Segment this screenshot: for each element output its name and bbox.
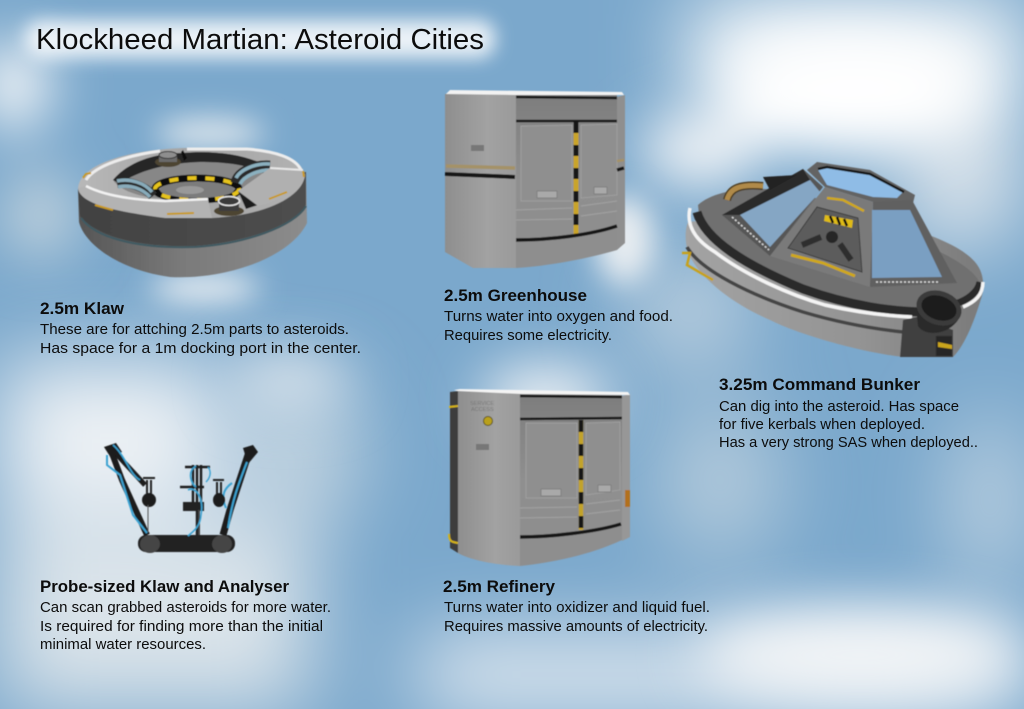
text: 2.5m Greenhouse: 2.5m Greenhouse bbox=[444, 286, 587, 305]
text: 3.25m Command Bunker: Can dig into the asteroid. Has space bbox=[719, 399, 959, 415]
text: 2.5m Klaw: 2.5m Klaw bbox=[40, 299, 125, 318]
text: 2.5m Klaw bbox=[40, 299, 361, 357]
text: 3.25m Command Bunker: Has a very strong SAS when deployed.. bbox=[719, 435, 978, 451]
part: 3.25m Command Bunker model bbox=[682, 162, 983, 357]
text: 3.25m Command Bunker: 3.25m Command Bunker bbox=[719, 375, 920, 394]
text: 2.5m Klaw: These are for attching 2.5m parts to asteroids. bbox=[40, 322, 349, 338]
text: 2.5m Refinery: Turns water into oxidizer and liquid fuel. bbox=[444, 600, 710, 616]
text: 2.5m Refinery bbox=[443, 577, 710, 635]
part: Probe-sized Klaw and Analyser model bbox=[104, 443, 258, 553]
text: 2.5m Klaw: Has space for a 1m docking port in the center. bbox=[40, 341, 361, 357]
text: 2.5m Greenhouse: Requires some electricity. bbox=[444, 328, 612, 344]
part: 2.5m Refinery model bbox=[449, 389, 630, 566]
text: Probe-sized Klaw and Analyser bbox=[40, 577, 331, 653]
text: 3.25m Command Bunker bbox=[719, 375, 978, 451]
text: 2.5m Greenhouse: Turns water into oxygen and food. bbox=[444, 309, 673, 325]
text: 2.5m Refinery: Requires massive amounts of electricity. bbox=[444, 619, 708, 635]
text: Probe-sized Klaw and Analyser: Probe-sized Klaw and Analyser bbox=[40, 577, 289, 596]
part: 2.5m Klaw model bbox=[78, 148, 307, 277]
text: Probe-sized Klaw and Analyser: minimal water resources. bbox=[40, 637, 206, 653]
text: 2.5m Greenhouse bbox=[444, 286, 673, 344]
text: Probe-sized Klaw and Analyser: Can scan grabbed asteroids for more water. bbox=[40, 600, 331, 616]
title glow bbox=[25, 20, 495, 58]
service access label: ACCESS bbox=[471, 407, 494, 413]
service access label: SERVICE bbox=[470, 401, 494, 407]
text: 3.25m Command Bunker: for five kerbals when deployed. bbox=[719, 417, 925, 433]
title: Klockheed Martian: Asteroid Cities bbox=[36, 24, 484, 56]
text: Probe-sized Klaw and Analyser: Is required for finding more than the initial bbox=[40, 619, 323, 635]
text: 2.5m Refinery: 2.5m Refinery bbox=[443, 577, 556, 596]
part: 2.5m Greenhouse model bbox=[445, 90, 625, 268]
